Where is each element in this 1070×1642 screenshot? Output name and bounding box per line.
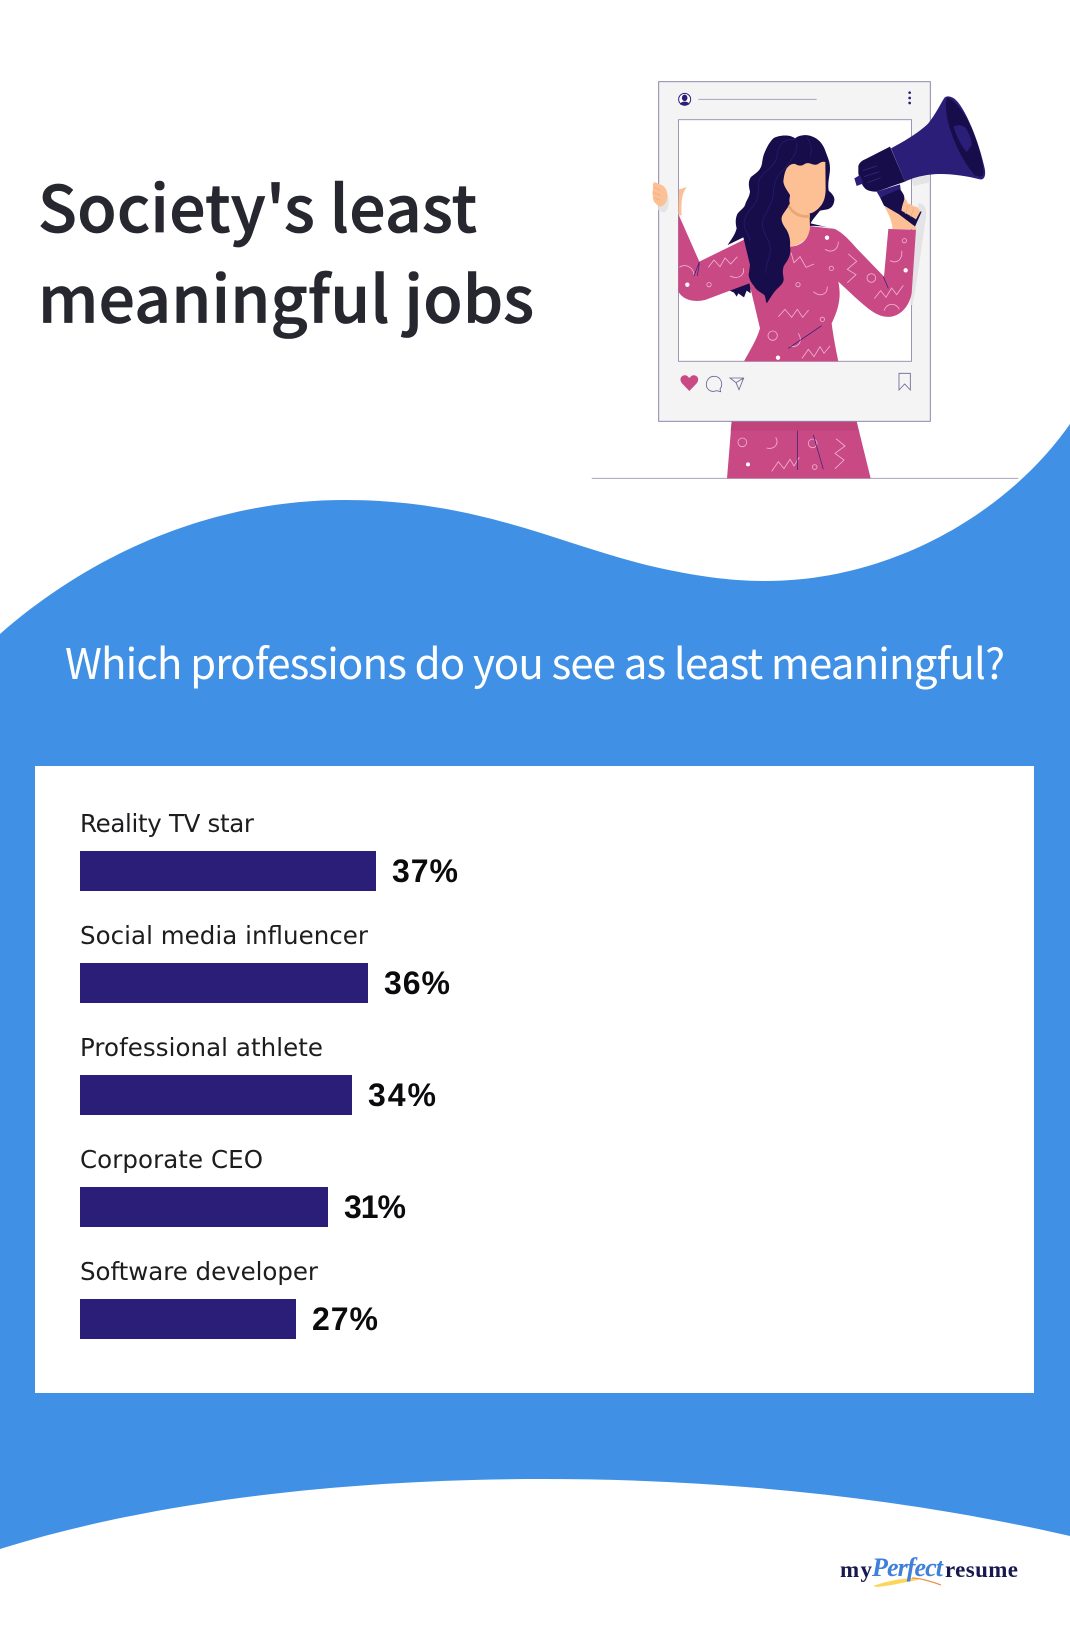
row: Software developer: Software developer xyxy=(80,1257,319,1286)
row: Social media influencer: 36% xyxy=(384,965,450,1001)
hair xyxy=(728,135,835,303)
post action icons xyxy=(680,373,910,392)
row: Software developer xyxy=(80,1257,378,1339)
left hand xyxy=(652,182,667,207)
row: Social media influencer xyxy=(80,921,450,1003)
row: Corporate CEO: Corporate CEO xyxy=(80,1145,263,1174)
woman's back hand thumb xyxy=(678,187,687,215)
question heading: Which professions do you see as least meaningful? xyxy=(65,631,1005,692)
logo: myPerfectResume xyxy=(840,1553,1018,1587)
row: Software developer: 27% xyxy=(312,1301,378,1337)
dress xyxy=(678,214,916,361)
post frame xyxy=(659,82,930,421)
row: Corporate CEO xyxy=(80,1145,406,1227)
skirt xyxy=(727,421,871,478)
face and neck xyxy=(782,162,826,247)
logo: myPerfectResume: Perfect xyxy=(871,1553,944,1582)
row: Professional athlete: 34% xyxy=(368,1077,436,1113)
row: Corporate CEO: 31% xyxy=(344,1189,406,1225)
row: Professional athlete: Professional athlete xyxy=(80,1033,323,1062)
logo: myPerfectResume: resume xyxy=(945,1557,1018,1582)
illustration: woman with megaphone in social post frame xyxy=(592,82,1018,478)
megaphone xyxy=(854,96,985,229)
back hair leaf xyxy=(728,281,751,297)
row: Reality TV star xyxy=(80,809,458,891)
title xyxy=(38,159,534,342)
bar chart xyxy=(80,809,458,1339)
panel: chart card xyxy=(35,766,1034,1393)
frame shadows xyxy=(658,175,930,305)
blue wave background xyxy=(0,424,1070,1549)
row: Reality TV star: 37% xyxy=(392,853,458,889)
row: Professional athlete xyxy=(80,1033,436,1115)
ground line xyxy=(592,477,1018,480)
logo: myPerfectResume: my xyxy=(840,1557,872,1582)
row: Social media influencer: Social media influencer xyxy=(80,921,369,950)
row: Reality TV star: Reality TV star xyxy=(80,809,255,838)
title: meaningful jobs xyxy=(38,250,534,342)
title: Society's least xyxy=(38,159,477,251)
